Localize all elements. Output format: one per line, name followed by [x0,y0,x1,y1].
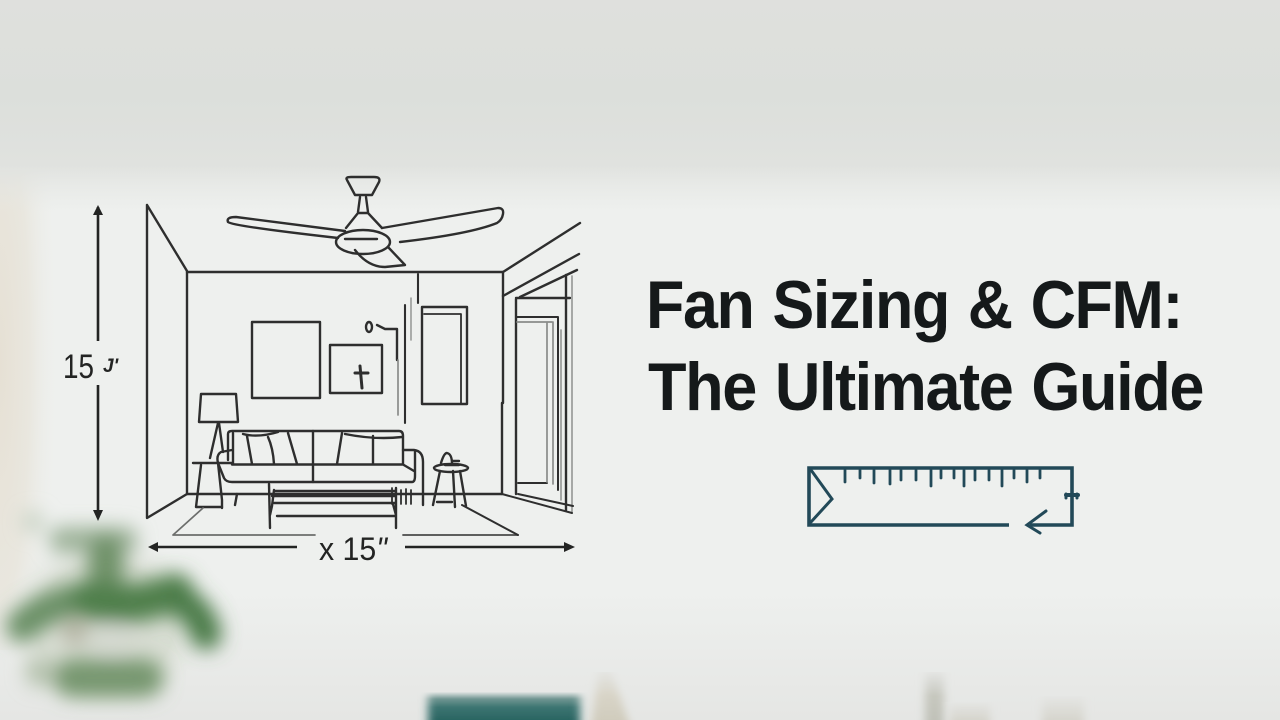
wall pictures [252,307,467,404]
dimension: width [148,531,575,567]
rug [173,505,518,535]
sofa [193,431,423,508]
floor lamp [199,394,238,458]
dimension: height: 15 [63,348,94,386]
walls and ceiling [147,205,580,518]
icon: tape measure [809,468,1078,533]
title [646,267,1203,425]
dimension: width: x 15" [319,531,389,567]
wall light [366,322,398,415]
side table [433,453,468,507]
blurred plant [22,512,206,687]
coffee table [269,484,411,528]
dimension: height [63,205,120,521]
title: The Ultimate Guide [648,349,1203,425]
title: Fan Sizing & CFM: [646,267,1182,343]
blurred sofa and cushions [428,672,1084,720]
ceiling fan [228,177,503,267]
room line drawing [147,177,580,535]
dimension: height: J' [103,356,120,377]
